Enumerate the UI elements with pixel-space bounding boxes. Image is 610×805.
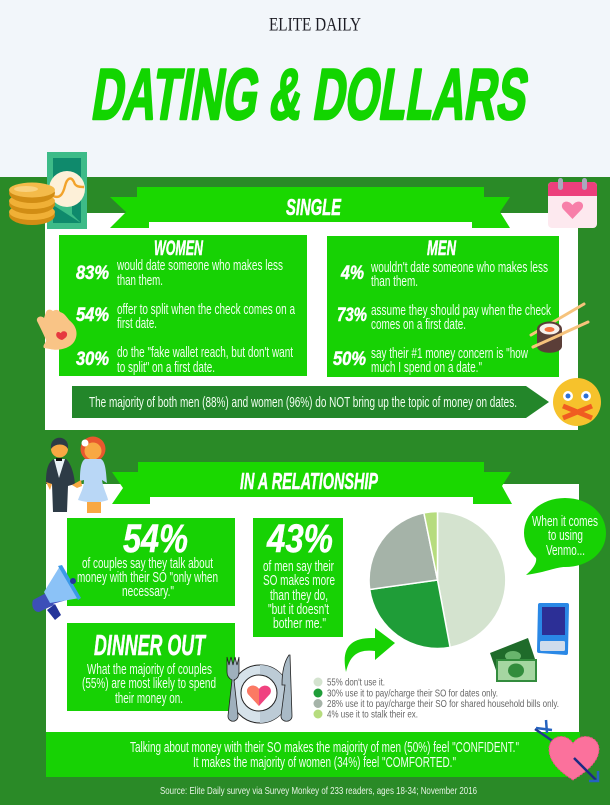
stat: 43 percent: "but it doesn't [268, 602, 329, 618]
stat: 54 percent: money with their SO "only when [77, 570, 218, 586]
legend: 30% use it to pay/charge their SO for dates only. [327, 688, 498, 700]
icon: phone [537, 603, 569, 655]
stat: dinner out: their money on. [115, 691, 183, 707]
panel: women: 54% [76, 305, 109, 326]
panel: men: 4% [340, 263, 364, 284]
stat: 43 percent: 43% [266, 517, 333, 561]
stat: 43 percent: SO makes more [263, 573, 335, 589]
banner: in a relationship: IN A RELATIONSHIP [240, 468, 378, 494]
stat: dinner out: What the majority of couples [87, 662, 212, 678]
icon: silenced emoji [553, 378, 601, 426]
stat: 43 percent: of men say their [263, 559, 334, 575]
speech bubble [524, 498, 606, 575]
banner: in a relationship [112, 462, 512, 504]
panel: women: first date. [117, 316, 157, 332]
icon: megaphone [32, 565, 81, 620]
panel: men: 73% [337, 305, 367, 326]
panel: women: would date someone who makes less [116, 258, 283, 274]
callout: money topic [72, 386, 549, 418]
icon: plate and cutlery [227, 655, 292, 723]
panel: women [59, 235, 307, 376]
stat: dinner out: DINNER OUT [94, 630, 206, 662]
pie chart [369, 512, 506, 648]
stat: dinner out: (55%) are most likely to spend [82, 676, 216, 692]
panel: men: than them. [371, 274, 418, 290]
banner: single [110, 187, 510, 228]
panel: men: say their #1 money concern is "how [371, 346, 528, 362]
panel: women: do the "fake wallet reach, but don't want [117, 345, 293, 361]
icon: couple [46, 436, 108, 513]
icon: cash and coins [9, 152, 87, 229]
panel: women: than them. [117, 273, 163, 289]
panel: men: comes on a first date. [371, 317, 466, 333]
panel: men: MEN [427, 237, 457, 260]
panel: men [327, 236, 559, 377]
panel: women: 83% [76, 263, 109, 284]
icon: calendar [548, 178, 597, 228]
panel: in a relationship [46, 462, 606, 732]
stat: dinner out [67, 623, 235, 711]
stat: 54 percent [67, 517, 235, 606]
legend [314, 676, 559, 720]
speech bubble: Venmo... [546, 543, 585, 559]
panel: women: WOMEN [154, 237, 203, 260]
icon: sushi with chopsticks [531, 304, 588, 353]
icon: banknotes [490, 638, 537, 682]
stat: 54 percent: necessary." [122, 584, 174, 600]
stat: 43 percent: bother me." [273, 616, 326, 632]
callout: feelings: It makes the majority of women (34%) feel "COMFORTED." [193, 755, 456, 771]
brand name: ELITE DAILY [269, 16, 361, 36]
speech bubble: to using [548, 528, 583, 544]
legend: 4% use it to stalk their ex. [327, 708, 418, 720]
panel: men: 50% [333, 349, 366, 370]
source: Source: Elite Daily survey via Survey Monkey of 233 readers, ages 18-34; November 2016 [160, 785, 477, 797]
panel: women: 30% [76, 349, 109, 370]
panel: single [45, 187, 578, 430]
callout: feelings [46, 732, 580, 777]
panel: men: much I spend on a date." [371, 360, 482, 376]
stat: 54 percent: 54% [123, 517, 188, 561]
stat: 54 percent: of couples say they talk about [82, 556, 213, 572]
stat: 43 percent: than they do, [270, 588, 328, 604]
icon: heart with arrow [535, 720, 599, 781]
panel: women: offer to split when the check comes on a [117, 302, 296, 318]
arrow to pie [345, 628, 395, 672]
banner: single: SINGLE [286, 194, 341, 220]
panel: women: to split" on a first date. [117, 360, 215, 376]
icon: hand with heart [37, 310, 77, 350]
legend: 55% don't use it. [327, 676, 385, 688]
stat: 43 percent [253, 517, 343, 637]
